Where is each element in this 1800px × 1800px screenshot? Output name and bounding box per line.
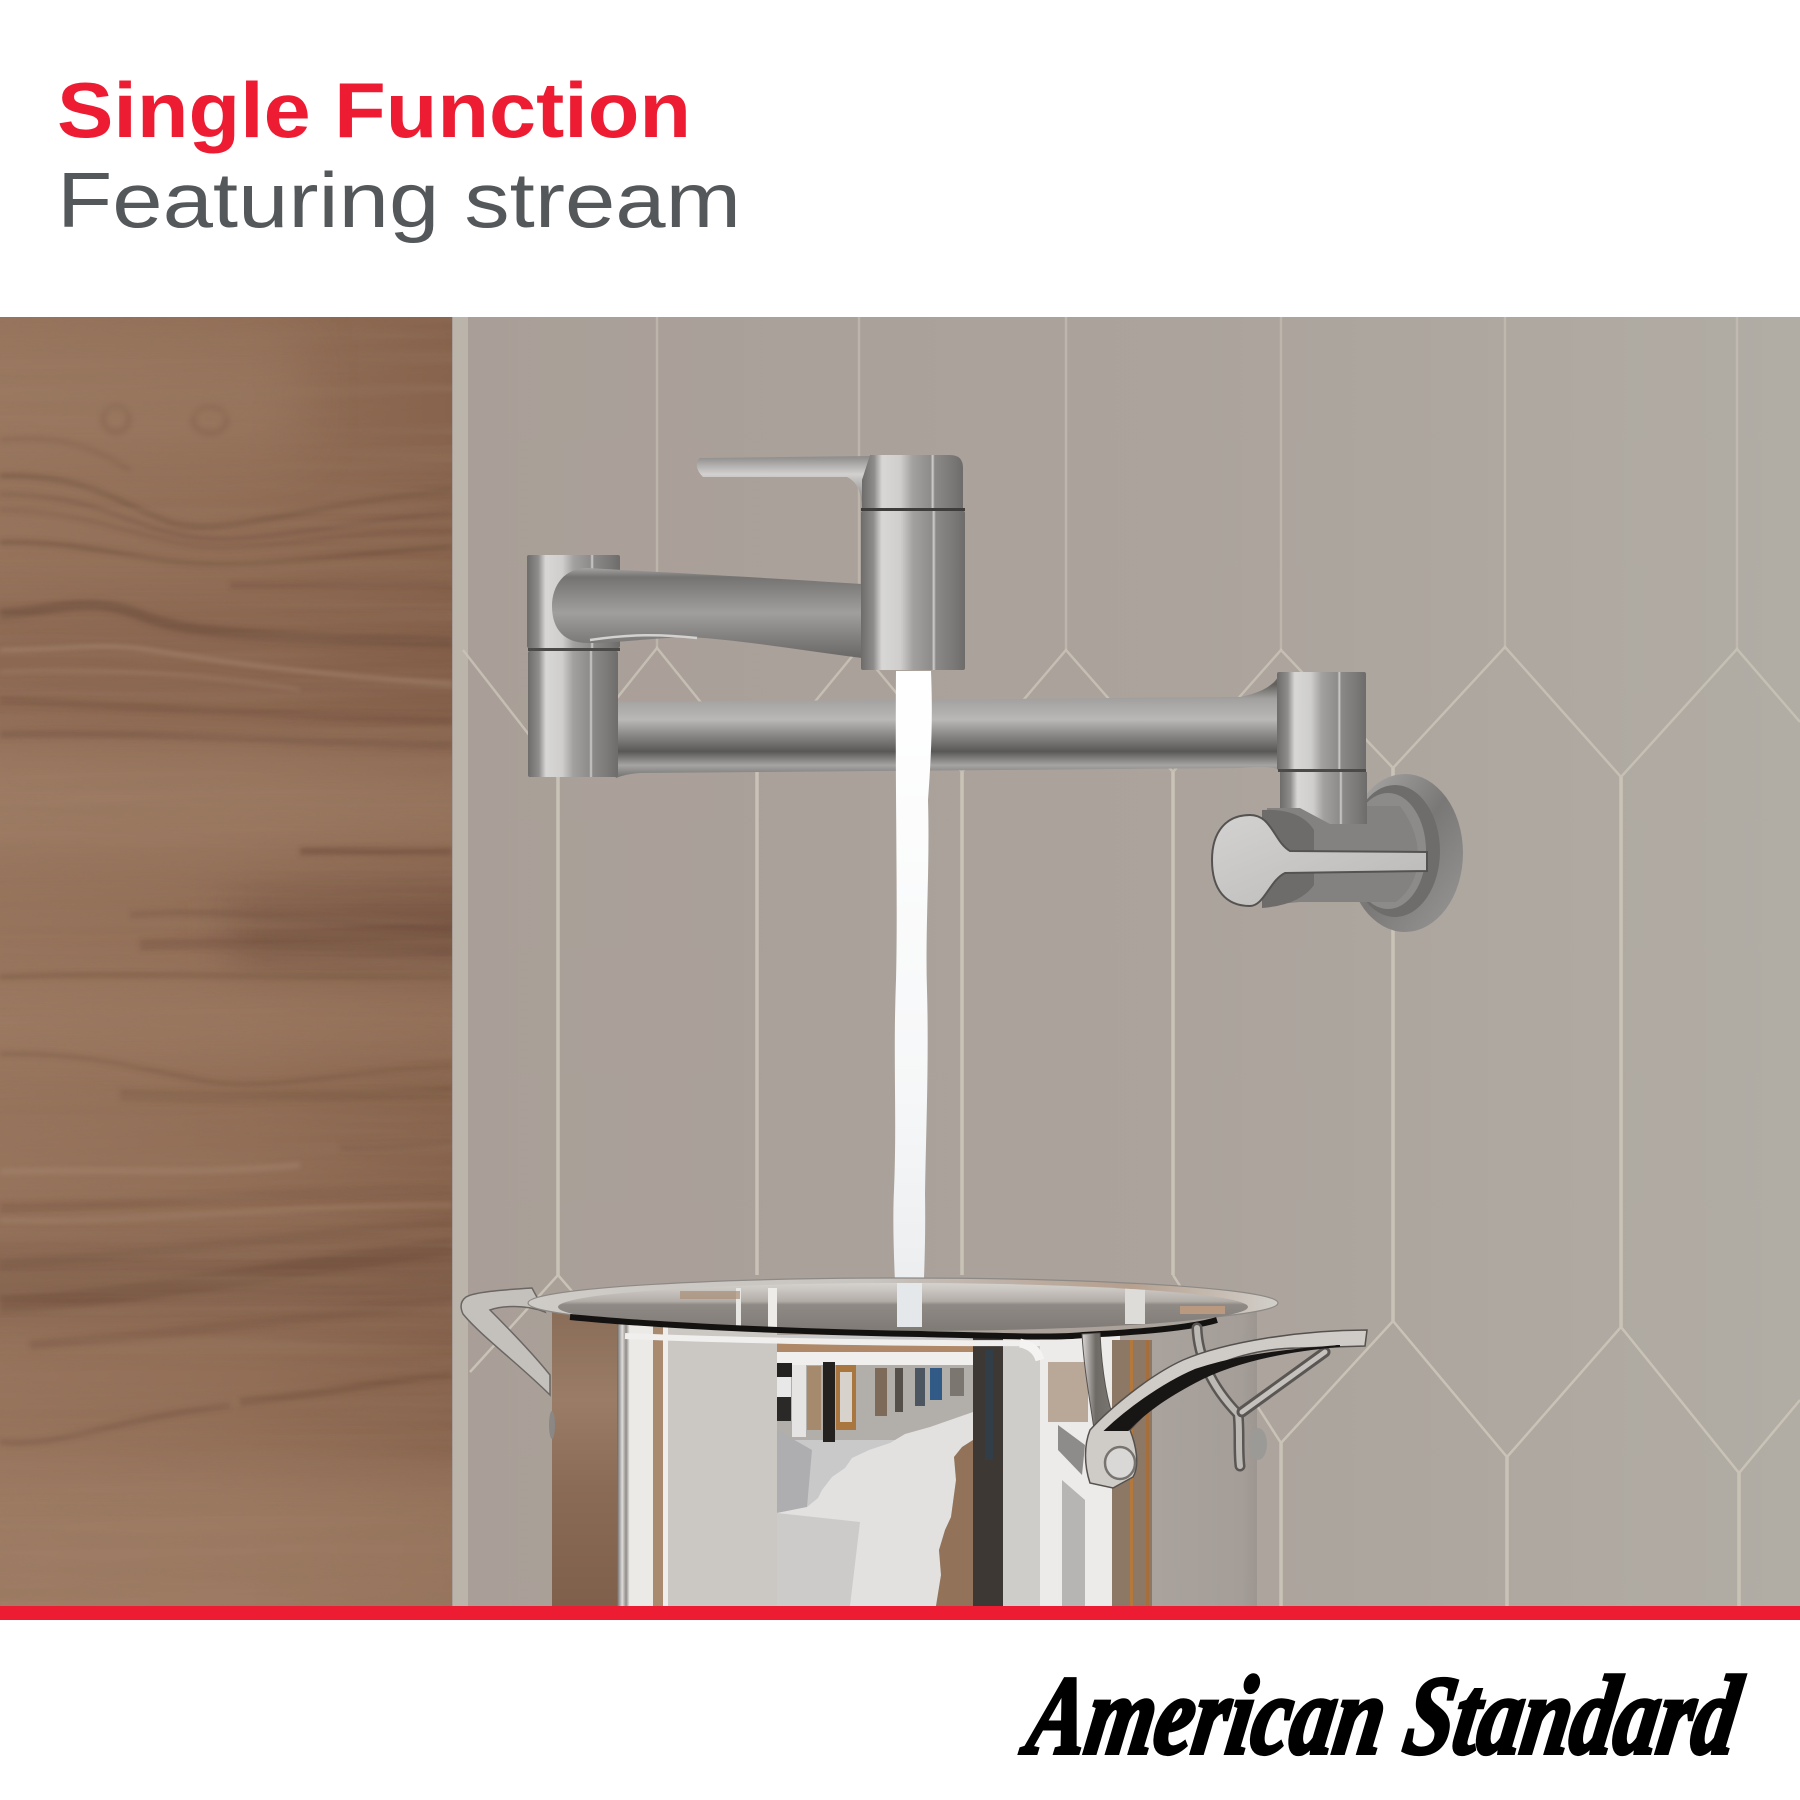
arm highlight [590,635,697,640]
right column elbow [1277,672,1367,826]
wall flange [1347,774,1463,932]
pot rivet left [549,1411,555,1439]
pot reflection [777,1335,973,1606]
upper spout arm [552,568,862,658]
wall valve body [1267,806,1418,905]
subheading: Featuring stream: Featuring stream [57,156,741,244]
tiled wall [452,317,1800,1606]
pot front strap [1082,1333,1116,1436]
wood panel [0,317,540,1670]
pot body [552,1312,1257,1606]
lower swing arm [608,672,1280,778]
valve knob and lever [1212,815,1427,906]
red divider bar [0,1606,1800,1620]
pot left handle [461,1288,550,1395]
stock pot [461,1278,1367,1606]
lever handle [697,455,963,508]
left swivel joint [527,555,620,777]
faucet: pot filler [527,455,1463,932]
tile grout lines [463,317,1800,1606]
pot interior [558,1283,1248,1331]
wood knots [4,422,128,440]
photo: kitchen scene [0,317,1800,1670]
pot rim [528,1278,1278,1360]
title block [57,66,741,244]
water stream [893,671,932,1327]
pot right handle strut [1197,1328,1325,1466]
water inside pot [897,1283,922,1327]
heading: Single Function: Single Function [57,66,691,154]
pot right handle [1086,1330,1367,1488]
valve collar [1262,810,1314,908]
handle rivet back [1249,1428,1267,1460]
spout column [861,511,965,670]
